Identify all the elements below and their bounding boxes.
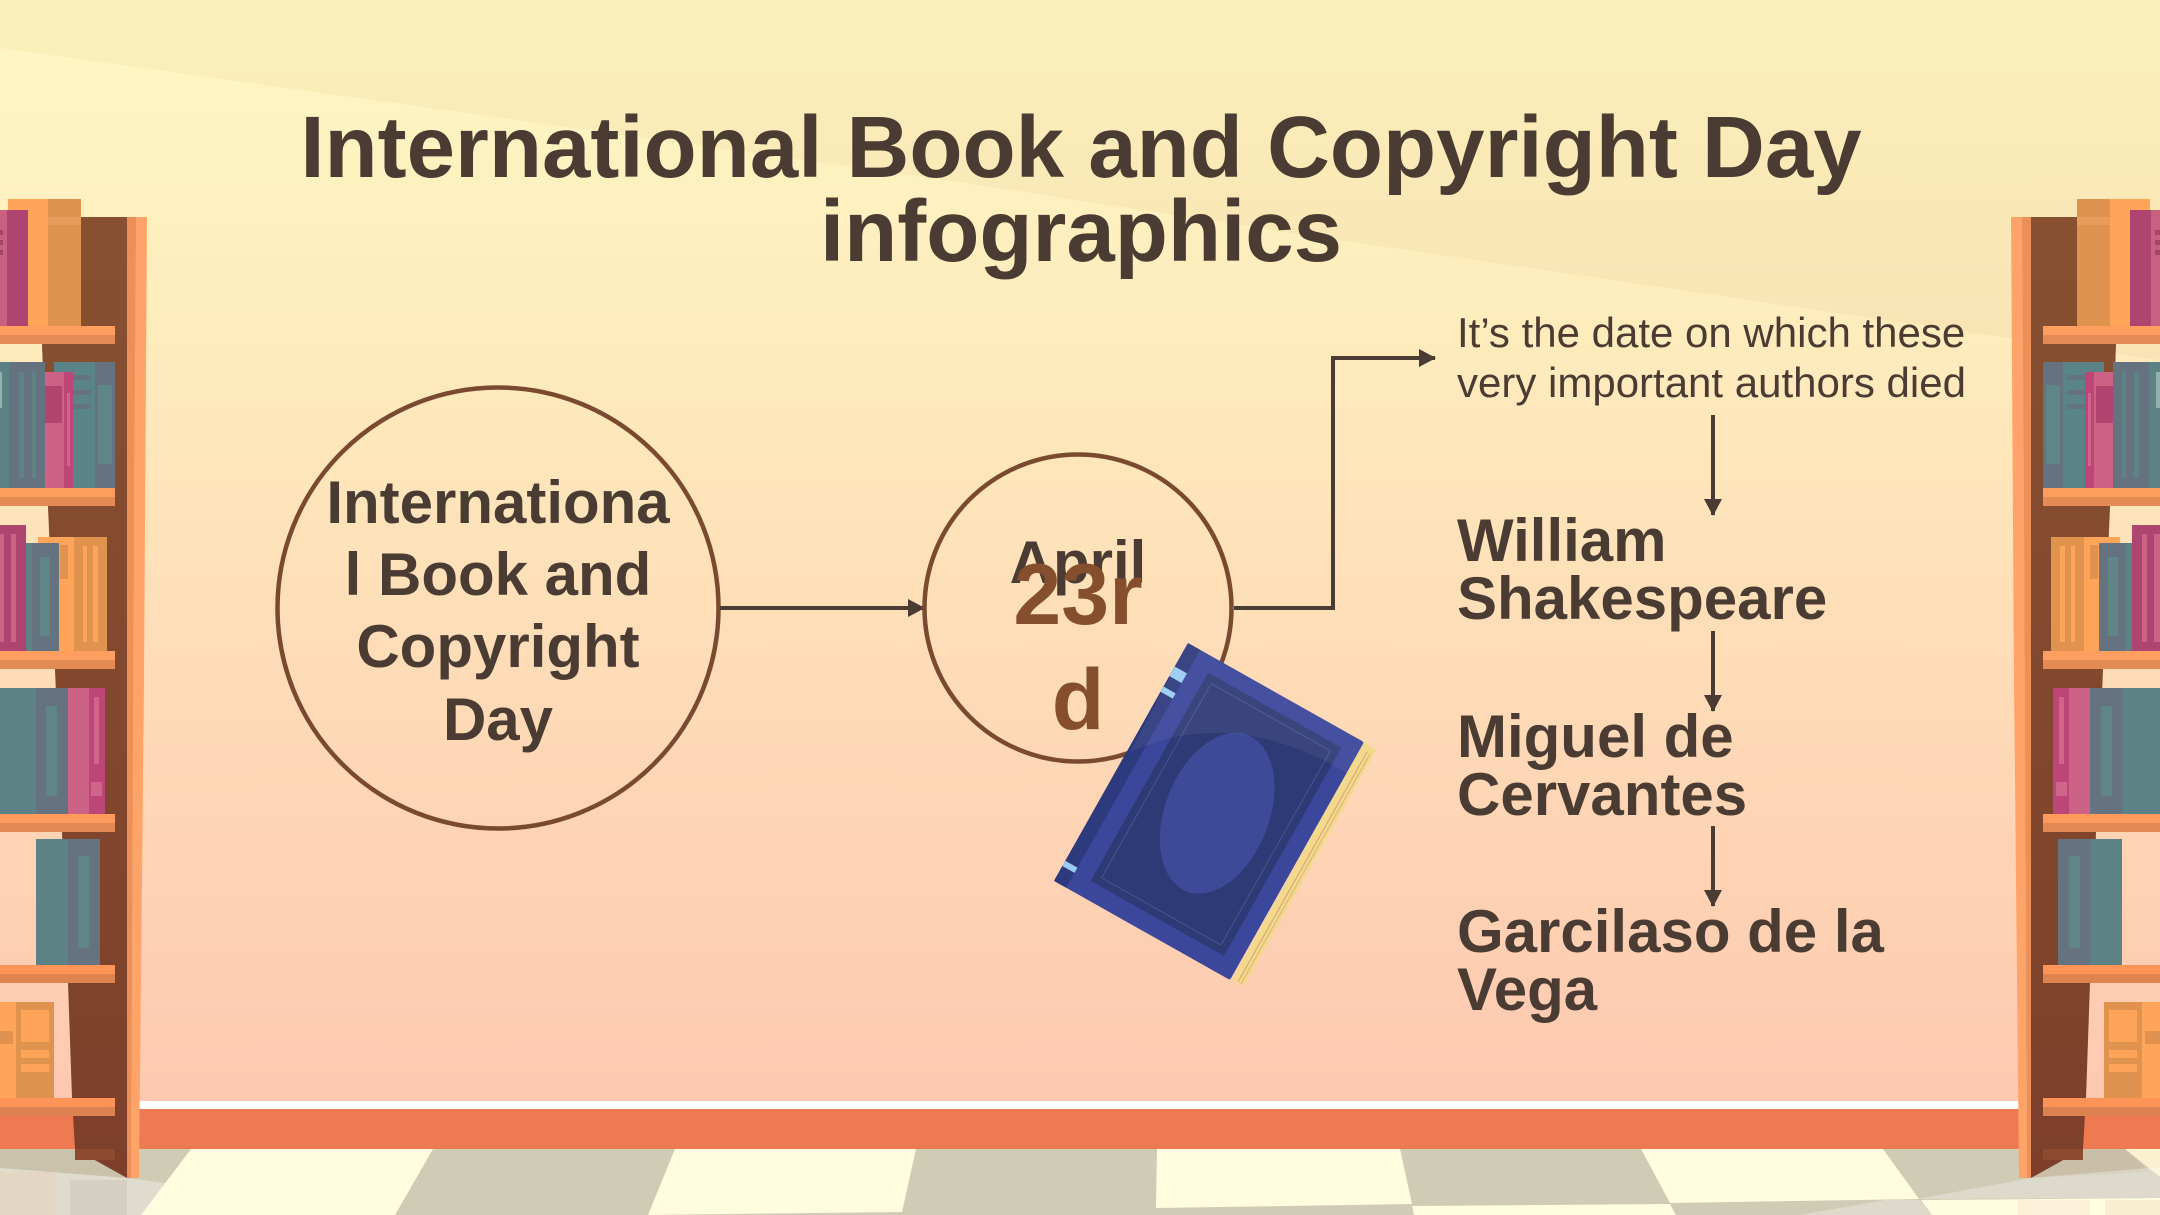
icon: blue book [1054, 643, 1376, 986]
author: Garcilaso de la Vega: Vega [1457, 956, 1598, 1023]
author: William Shakespeare: Shakespeare [1457, 565, 1827, 632]
author: Miguel de Cervantes: Miguel de [1457, 703, 1734, 770]
left baseboard section [0, 1116, 76, 1149]
arrow: Cervantes to Garcilaso [1711, 826, 1715, 906]
circle: International Book and Copyright Day: Copyright [356, 613, 640, 680]
circle: April 23rd: 23r [1013, 547, 1143, 643]
circle: April 23rd: d [1052, 652, 1104, 748]
circle: April 23rd [924, 454, 1232, 762]
circle: International Book and Copyright Day: l Book and [345, 541, 651, 608]
title [300, 99, 1862, 280]
skirting board [0, 1101, 2160, 1149]
circle: International Book and Copyright Day: Day [443, 686, 554, 753]
author: William Shakespeare [1457, 507, 1827, 632]
background top band [0, 0, 2160, 360]
explanation text: It’s the date on which these [1457, 309, 1965, 356]
right bookshelf [2011, 199, 2160, 1178]
author: Miguel de Cervantes [1457, 703, 1747, 828]
circle: April 23rd: April [1010, 529, 1146, 596]
explanation text: very important authors died [1457, 359, 1966, 406]
left bookshelf [0, 199, 147, 1178]
author: Garcilaso de la Vega: Garcilaso de la [1457, 898, 1885, 965]
arrow: day to date [720, 606, 924, 610]
checkered floor [0, 1149, 2160, 1215]
author: Garcilaso de la Vega [1457, 898, 1885, 1023]
explanation text [1457, 309, 1966, 406]
title: International Book and Copyright Day [300, 99, 1862, 196]
circle: International Book and Copyright Day [278, 388, 718, 828]
circle: International Book and Copyright Day: Internationa [326, 469, 670, 536]
title: infographics [820, 183, 1342, 280]
arrow: Shakespeare to Cervantes [1711, 631, 1715, 711]
author: Miguel de Cervantes: Cervantes [1457, 761, 1747, 828]
arrow: date to explanation [1234, 358, 1435, 608]
author: William Shakespeare: William [1457, 507, 1667, 574]
arrow: explanation to Shakespeare [1711, 415, 1715, 515]
